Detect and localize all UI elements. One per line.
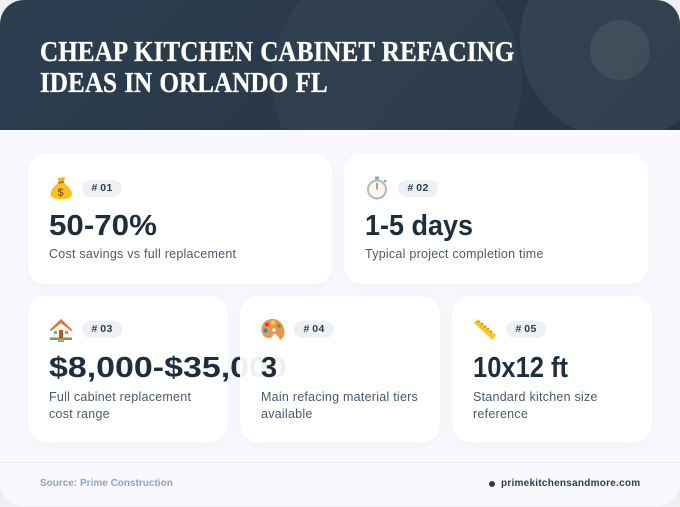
panel: stat 04 material tiers <box>240 296 440 442</box>
badge <box>506 321 546 338</box>
badge <box>82 321 122 338</box>
icon: house <box>50 319 72 342</box>
badge <box>294 321 334 338</box>
title: IDEAS IN ORLANDO FL <box>40 68 328 99</box>
panel: stat 03 replacement cost <box>28 296 228 442</box>
panel: stat 05 kitchen size <box>452 296 652 442</box>
value: 3 <box>261 352 277 384</box>
value: 50-70% <box>49 210 157 242</box>
label: Main refacing material tiers available <box>261 390 418 421</box>
header banner <box>0 0 680 130</box>
value: 1-5 days <box>365 210 473 242</box>
panel: stat 02 project time <box>344 154 648 284</box>
badge: # 05 <box>516 323 537 335</box>
icon: ruler <box>474 319 496 340</box>
label: Full cabinet replacement cost range <box>49 390 191 421</box>
badge: # 03 <box>92 323 113 335</box>
icon: money bag <box>50 177 72 199</box>
icon: stopwatch <box>367 176 387 200</box>
panel: stat 01 cost savings <box>28 154 332 284</box>
label: Standard kitchen size reference <box>473 390 598 421</box>
label: Cost savings vs full replacement <box>49 247 236 261</box>
icon: palette <box>262 319 284 340</box>
badge: # 04 <box>304 323 325 335</box>
website with dot: primekitchensandmore.com <box>501 478 640 489</box>
title: CHEAP KITCHEN CABINET REFACING <box>40 37 514 68</box>
icon: money bag: $ <box>57 187 64 199</box>
value: $8,000-$35,000 <box>49 352 287 384</box>
value: 10x12 ft <box>473 352 568 384</box>
badge: # 01 <box>92 182 113 194</box>
badge: # 02 <box>408 182 429 194</box>
badge <box>82 180 122 197</box>
label: Typical project completion time <box>365 247 544 261</box>
title <box>40 37 514 99</box>
badge <box>398 180 438 197</box>
source text: Source: Prime Construction <box>40 478 173 489</box>
footer <box>0 462 680 506</box>
